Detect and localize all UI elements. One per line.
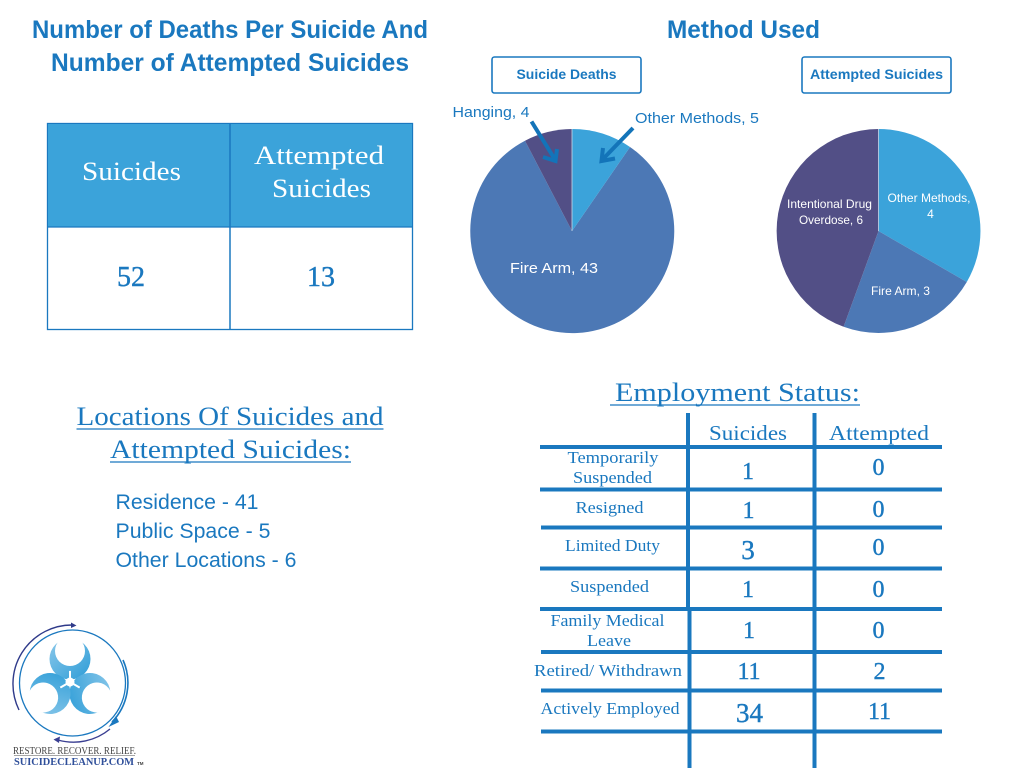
- pie chart: suicide deaths: [452, 104, 759, 333]
- attempted column values: 0: [872, 535, 884, 561]
- label: other methods: Other Methods,: [888, 191, 970, 205]
- row labels: Retired/ Withdrawn: [534, 661, 683, 680]
- attempted column values: 11: [868, 699, 891, 725]
- label: other methods: [888, 191, 970, 221]
- heading: locations: Locations Of Suicides and: [76, 402, 384, 431]
- icon: circular arrows: [13, 622, 128, 743]
- label: intentional drug overdose: Overdose, 6: [799, 213, 863, 227]
- table header: attempted suicides: Suicides: [272, 174, 371, 203]
- row labels: Leave: [587, 631, 631, 650]
- heading: employment status: Employment Status:: [615, 378, 860, 407]
- attempted column values: 2: [874, 659, 886, 685]
- row labels: [534, 448, 683, 718]
- trademark mark: TM: [137, 761, 144, 766]
- table header: suicides: Suicides: [82, 157, 181, 186]
- logo tagline: RESTORE. RECOVER. RELIEF.: [13, 746, 136, 757]
- value: suicides: 52: [117, 262, 145, 293]
- label: intentional drug overdose: [787, 197, 872, 227]
- suicides column values: 1: [743, 618, 755, 644]
- list: location counts: Public Space - 5: [116, 519, 271, 543]
- label: other methods: Other Methods, 5: [635, 110, 759, 127]
- row labels: Suspended: [570, 577, 650, 596]
- legend box: suicide deaths: Suicide Deaths: [516, 67, 616, 82]
- row labels: Suspended: [573, 468, 653, 487]
- pie chart: attempted suicides: [777, 129, 980, 333]
- heading: locations: [76, 402, 384, 464]
- logo web address: SUICIDECLEANUP.COM: [14, 757, 134, 768]
- legend box: attempted suicides: Attempted Suicides: [810, 67, 943, 82]
- suicides column values: 1: [742, 459, 754, 485]
- table header: attempted suicides: [254, 141, 384, 203]
- suicides column values: 34: [736, 698, 764, 728]
- table header: attempted suicides: Attempted: [254, 141, 384, 170]
- attempted column values: [868, 455, 891, 725]
- attempted column values: 0: [872, 577, 884, 603]
- row labels: Actively Employed: [540, 699, 680, 718]
- row labels: Limited Duty: [565, 536, 661, 555]
- locations section: [76, 402, 384, 572]
- suicides column values: 11: [737, 659, 761, 685]
- heading: deaths and attempts: Number of Deaths Per Suicide And: [32, 16, 428, 44]
- employment status section: [534, 378, 942, 768]
- list: location counts: Residence - 41: [116, 490, 258, 514]
- label: fire arm: Fire Arm, 43: [510, 261, 598, 277]
- suicides column values: 1: [742, 498, 754, 524]
- label: other methods: 4: [927, 207, 934, 221]
- table grid: employment: [540, 413, 942, 768]
- row labels: Family Medical: [550, 611, 665, 630]
- heading: method used: Method Used: [667, 16, 820, 44]
- suicides column values: 1: [742, 577, 754, 603]
- attempted column values: 0: [872, 618, 884, 644]
- row labels: Resigned: [576, 498, 644, 517]
- attempted column values: 0: [872, 455, 884, 481]
- label: hanging: Hanging, 4: [452, 104, 530, 121]
- suicides column values: [736, 459, 764, 728]
- value: attempted suicides: 13: [307, 262, 335, 293]
- column headers: Attempted: [829, 421, 930, 445]
- logo: suicide cleanup: [7, 622, 144, 768]
- label: intentional drug overdose: Intentional Drug: [787, 197, 872, 211]
- column headers: Suicides: [709, 421, 787, 445]
- label: fire arm: Fire Arm, 3: [871, 284, 930, 298]
- suicides column values: 3: [741, 535, 755, 565]
- attempted column values: 0: [872, 497, 884, 523]
- arrow: hanging: [532, 122, 557, 161]
- icon: biohazard symbol: [30, 642, 110, 714]
- heading: locations: Attempted Suicides:: [110, 435, 351, 464]
- list: location counts: Other Locations - 6: [116, 548, 297, 572]
- row labels: Temporarily: [568, 448, 659, 467]
- table: suicides and attempted suicides: [47, 123, 413, 330]
- list: location counts: [116, 490, 297, 572]
- column headers: [709, 421, 930, 445]
- legend box: suicide deaths: [492, 57, 641, 93]
- arrow: other methods: [602, 128, 633, 161]
- legend box: attempted suicides: [802, 57, 951, 93]
- heading: deaths and attempts: [32, 16, 428, 77]
- heading: deaths and attempts: Number of Attempted Suicides: [51, 49, 409, 77]
